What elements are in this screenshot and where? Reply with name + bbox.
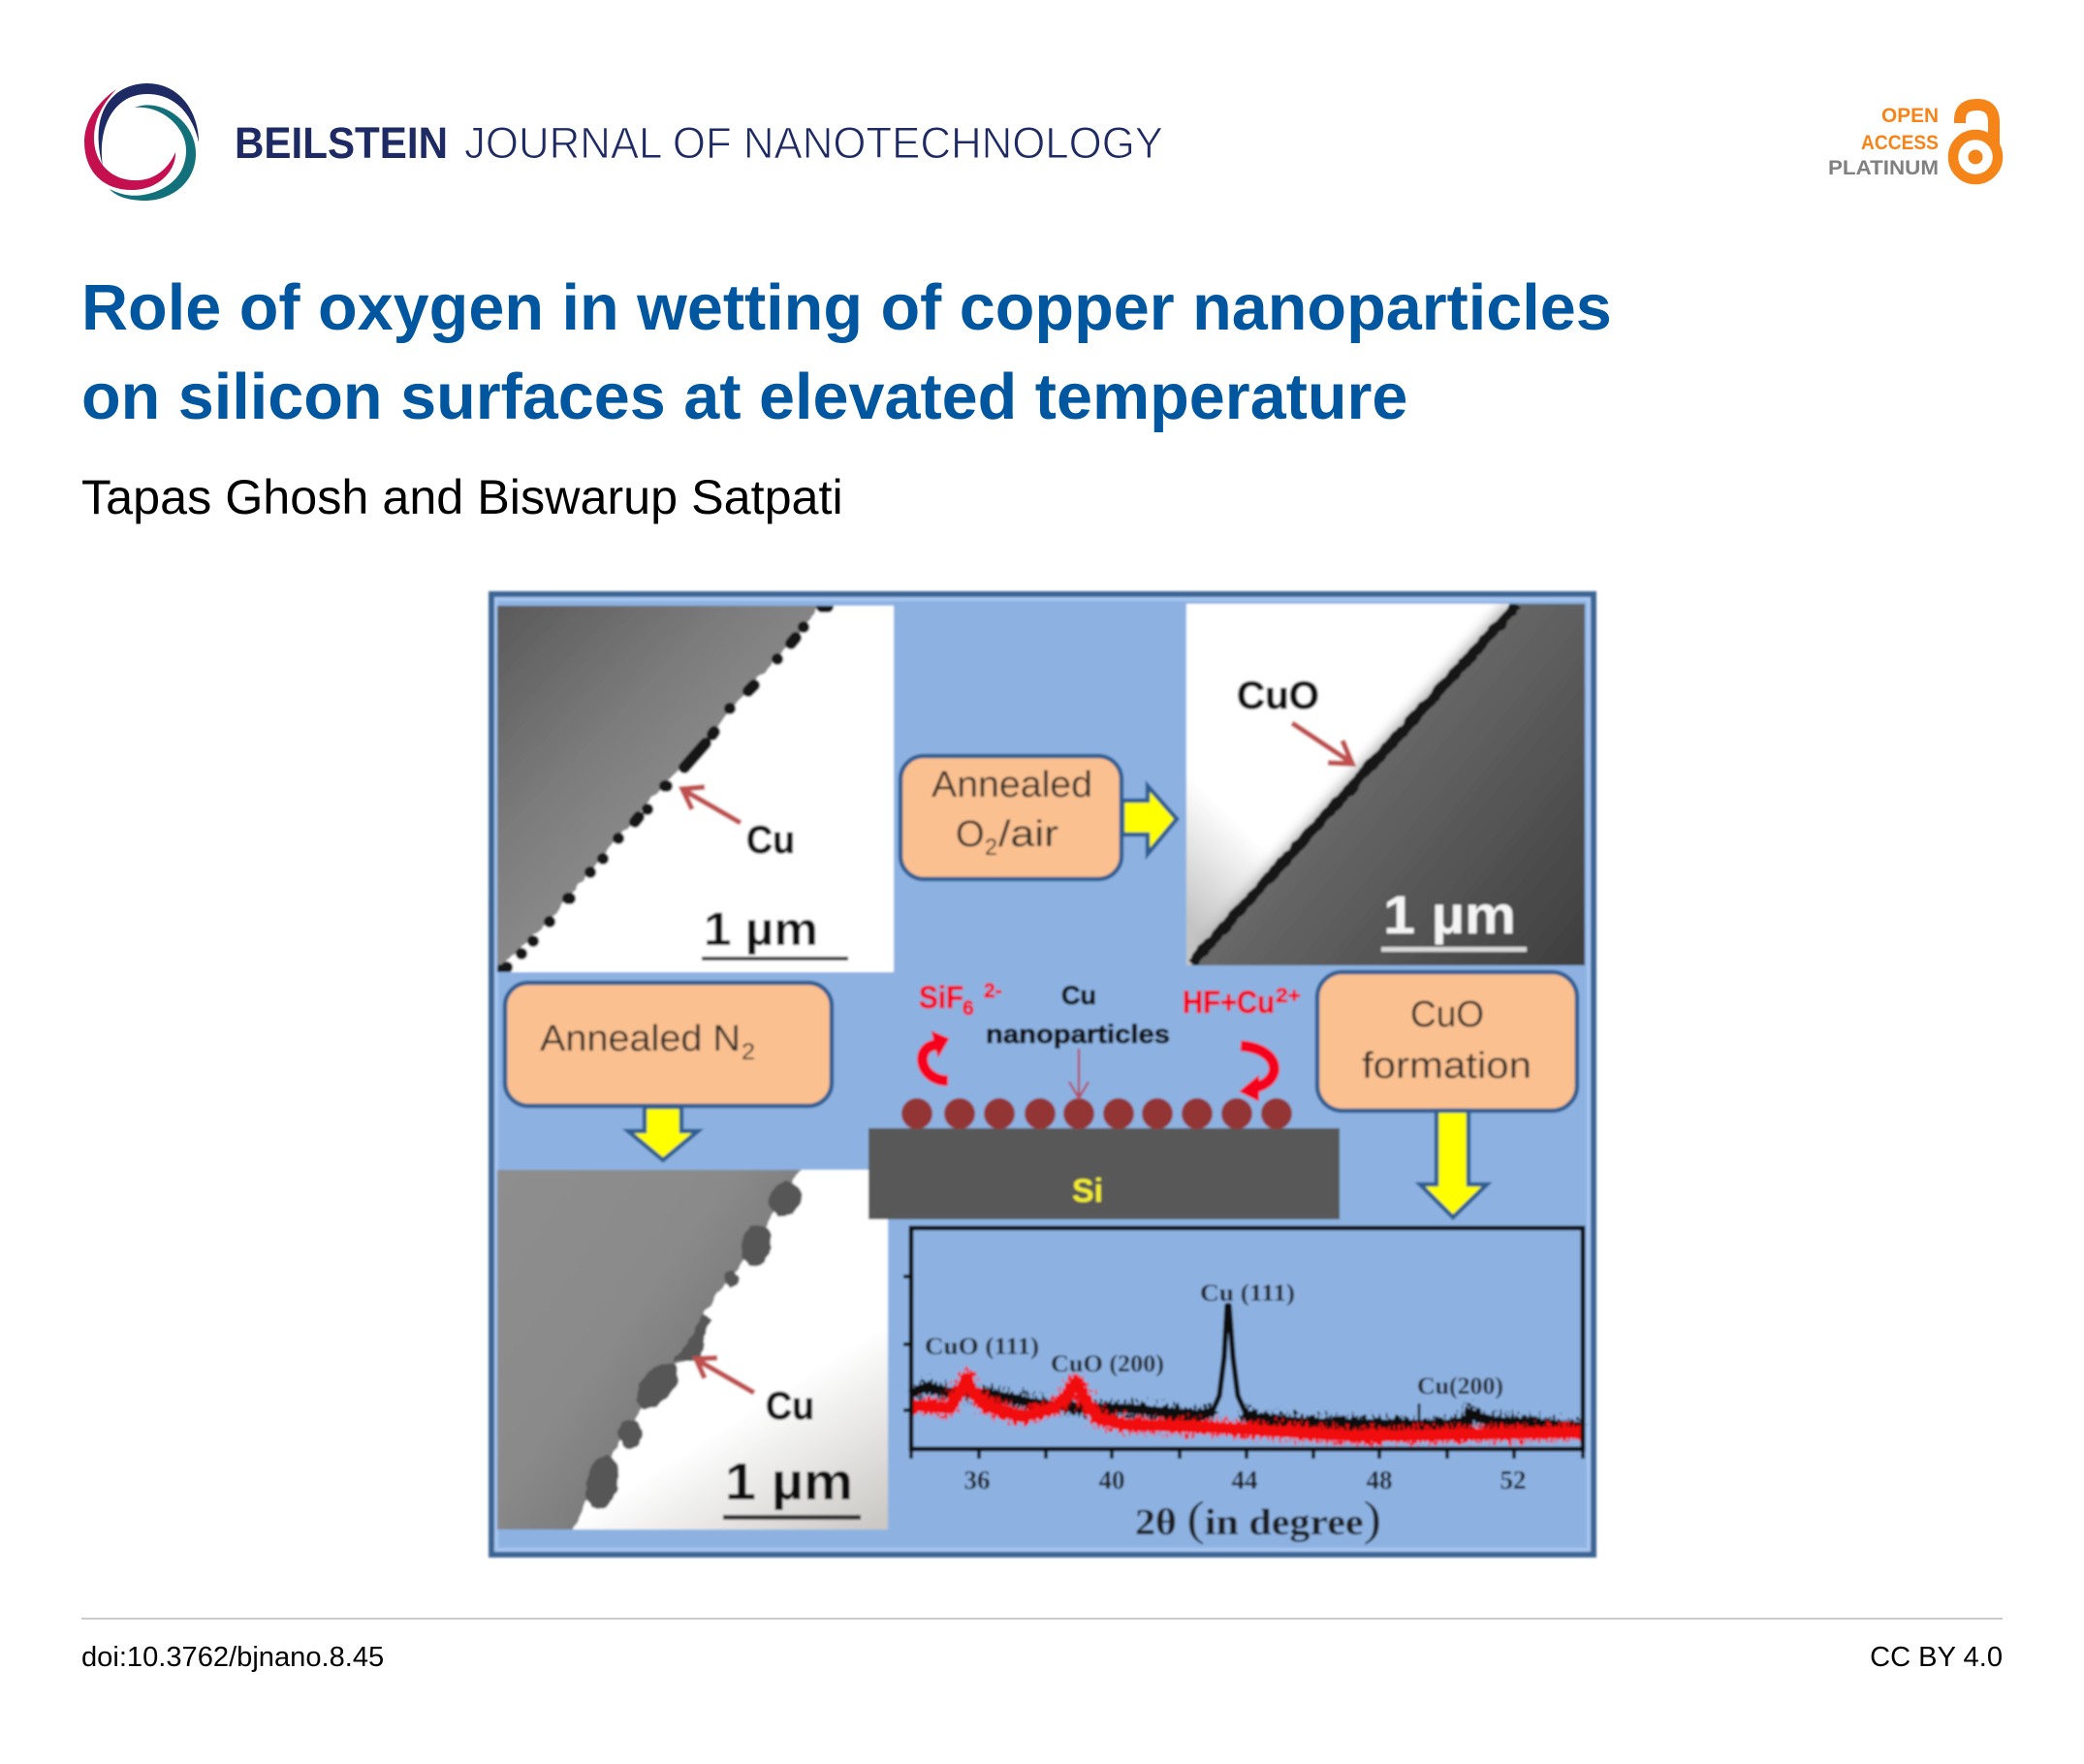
label: SiF6 2-: 6 [963,997,974,1020]
x axis tick labels: 44 [1231,1465,1258,1495]
journal logo [84,83,199,201]
scale bar: 1 um: 1 µm [725,1453,853,1511]
box: annealed O2/air [900,756,1121,879]
label: Cu nanoparticles: nanoparticles [986,1020,1170,1049]
arrow: Cu pointer [696,1358,754,1393]
box: annealed N2: Annealed N [540,1019,741,1059]
peak labels: Cu (111) [1200,1280,1295,1307]
x axis tick labels: 48 [1367,1465,1392,1495]
arrow: to N2 TEM [628,1107,698,1160]
box: annealed N2: 2 [742,1039,755,1065]
Cu nanoparticles row [901,1098,1292,1129]
chart: XRD spectra [903,1228,1583,1545]
journal name: JOURNAL OF NANOTECHNOLOGY [464,118,1163,168]
scale bar: 1 um: 1 µm [1383,884,1516,945]
open access platinum badge: ACCESS [1861,132,1939,154]
label: SiF6 2-: SiF [919,980,963,1015]
journal name: BEILSTEIN [235,118,448,168]
label: Cu nanoparticles [986,981,1170,1049]
arrow: to XRD chart [1420,1111,1487,1217]
panel: TEM N2-annealed Cu [496,1168,890,1531]
substrate: Si [868,1128,1340,1219]
arrow: Cu pointer [682,787,741,823]
open access platinum badge: OPEN [1881,105,1939,127]
open access platinum badge: PLATINUM [1828,157,1939,179]
box: annealed O2/air: Annealed [931,765,1092,805]
x axis tick labels: 40 [1099,1465,1124,1495]
title [81,272,1612,433]
arrow: CuO pointer [1292,723,1352,764]
x axis tick labels: 36 [963,1465,991,1495]
panel: TEM CuO [1186,601,1590,969]
figure: graphical abstract [475,591,1594,1555]
label: SiF6 2- [919,980,1002,1020]
scale bar: 1 um [702,904,848,961]
footer: doi: doi:10.3762/bjnano.8.45 [81,1642,384,1673]
label: Cu nanoparticles: Cu [1061,981,1096,1010]
scale bar: 1 um: 1 µm [704,904,818,956]
label: CuO: CuO [1237,675,1319,717]
box: CuO formation: formation [1362,1046,1531,1087]
peak labels: Cu(200) [1417,1373,1503,1400]
arrow: HF+Cu2+ entering [1241,1046,1275,1100]
box: CuO formation [1317,972,1577,1111]
box: annealed O2/air: O [956,814,985,855]
box: annealed O2/air: 2 [985,835,997,861]
peak labels: CuO (111) [925,1334,1039,1360]
black spectrum [913,1306,1581,1427]
footer rule [81,1618,2003,1620]
label: HF+Cu2+: 2+ [1276,985,1301,1007]
arrow: nanoparticle pointer [1069,1049,1089,1098]
peak labels [925,1280,1503,1400]
substrate: Si: Si [1072,1173,1103,1210]
label: Cu: Cu [766,1385,814,1428]
label: Cu: Cu [746,819,795,862]
authors: Tapas Ghosh and Biswarup Satpati [81,469,843,524]
copper particles [582,1176,807,1513]
peak labels: CuO (200) [1051,1351,1164,1377]
label: HF+Cu2+: HF+Cu [1183,985,1275,1020]
box: CuO formation: CuO [1410,994,1484,1035]
axes frame [911,1228,1583,1449]
x axis title: 2θ (in degree ) [1135,1491,1381,1545]
axis ticks [903,1276,1583,1459]
x axis tick labels [963,1465,1526,1495]
title: Role of oxygen in wetting of copper nanoparticles [81,272,1612,344]
footer: licence: CC BY 4.0 [1870,1642,2003,1673]
label: SiF6 2-: 2- [984,980,1002,1002]
title: on silicon surfaces at elevated temperature [81,362,1407,433]
box: annealed N2 [505,983,832,1106]
arrow: SiF6 leaving [923,1032,948,1081]
open access platinum badge [1828,105,1998,179]
x axis tick labels: 52 [1500,1465,1526,1495]
box: annealed O2/air: /air [998,814,1058,855]
panel: Si substrate with Cu nanoparticles [868,980,1340,1219]
red spectrum [913,1376,1581,1436]
arrow: to CuO TEM [1122,786,1177,854]
panel: TEM as-prepared Cu [485,591,894,979]
